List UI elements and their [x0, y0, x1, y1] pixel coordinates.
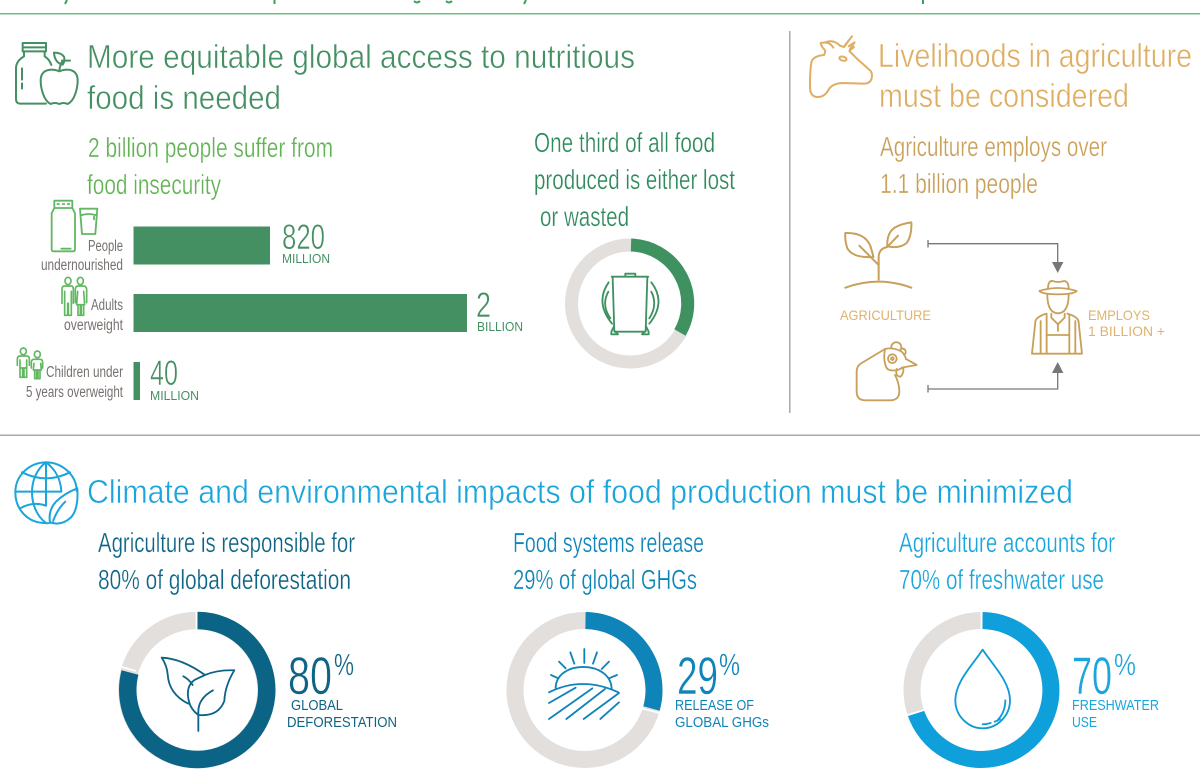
divider: vertical — [789, 31, 790, 413]
icon: sprout — [845, 222, 911, 288]
text: freshwater — [899, 527, 1115, 595]
text: food insecurity — [87, 132, 333, 200]
heading: more equitable access: food is needed — [87, 79, 281, 116]
stat: 29 percent: 29 — [677, 647, 718, 706]
text: agriculture employs: Agriculture employs over — [880, 131, 1107, 162]
value: 40 million: MILLION — [150, 388, 199, 403]
panel: climate and environment — [15, 462, 1159, 760]
label: children overweight — [26, 364, 124, 401]
icon: chicken — [857, 342, 917, 400]
text: greenhouse gases: 29% of global GHGs — [513, 564, 697, 595]
icon: children — [17, 348, 43, 379]
value: 820 million: 820 — [282, 218, 325, 257]
stat: 70 percent: % — [1114, 647, 1136, 682]
text: greenhouse gases — [513, 527, 704, 595]
value: 2 billion: 2 — [476, 286, 491, 325]
stat: 70 percent: 70 — [1072, 647, 1112, 706]
label: children overweight: 5 years overweight — [26, 384, 124, 401]
stat: 29 percent: RELEASE OF — [675, 698, 754, 714]
icon: water drop — [955, 650, 1010, 728]
label: adults overweight — [64, 297, 124, 334]
text: agriculture employs — [880, 131, 1107, 199]
icon: adults — [62, 277, 87, 315]
value: 2 billion: BILLION — [477, 319, 523, 334]
stat: 29 percent: GLOBAL GHGs — [675, 715, 769, 731]
label: children overweight: Children under — [46, 364, 123, 381]
heading: livelihoods — [878, 37, 1192, 114]
icon: cow — [810, 36, 872, 97]
label: adults overweight: overweight — [64, 317, 124, 334]
bar chart: malnutrition — [17, 201, 523, 403]
donut chart: 70 percent freshwater — [905, 611, 1051, 760]
stat: 70 percent: USE — [1072, 715, 1097, 731]
divider: horizontal — [0, 434, 1200, 436]
text: agriculture employs: 1.1 billion people — [880, 168, 1038, 199]
stat: 70 percent — [1072, 647, 1159, 731]
text: deforestation: 80% of global deforestation — [98, 564, 351, 595]
icon: sun over field — [549, 649, 619, 719]
value: 2 billion — [476, 286, 523, 334]
header rule — [0, 13, 1200, 14]
value: 820 million: MILLION — [282, 251, 330, 266]
arrow: agriculture to farmer — [928, 240, 1063, 273]
icon: jar and apple — [16, 43, 78, 104]
label: people undernourished: undernourished — [41, 257, 123, 274]
label: adults overweight: Adults — [91, 297, 123, 314]
heading: livelihoods: must be considered — [879, 77, 1129, 114]
label: employs 1 billion: 1 BILLION + — [1088, 323, 1165, 339]
text: food lost or wasted: produced is either lost — [534, 164, 735, 195]
label: employs 1 billion — [1088, 307, 1165, 339]
icon: carton and glass — [52, 201, 97, 251]
heading: more equitable access: More equitable global access to nutritious — [87, 38, 635, 75]
icon: globe and leaf — [15, 462, 78, 524]
icon: leaves — [162, 658, 234, 731]
value: 40 million — [150, 354, 199, 403]
text: food lost or wasted: or wasted — [540, 201, 629, 232]
label: employs 1 billion: EMPLOYS — [1088, 307, 1150, 323]
text: greenhouse gases: Food systems release — [513, 527, 704, 558]
label: people undernourished: People — [88, 238, 123, 255]
text: deforestation: Agriculture is responsible for — [98, 527, 355, 558]
text: food insecurity: 2 billion people suffer from — [88, 132, 333, 163]
stat: 80 percent: GLOBAL — [291, 698, 343, 714]
donut chart: 29 percent GHGs — [515, 620, 662, 760]
stat: 29 percent — [675, 647, 769, 731]
stat: 80 percent — [287, 647, 397, 731]
stat: 80 percent: % — [334, 647, 354, 682]
text: food insecurity: food insecurity — [87, 169, 221, 200]
stat: 70 percent: FRESHWATER — [1072, 698, 1159, 714]
heading: more equitable access — [87, 38, 635, 116]
heading: climate impacts: Climate and environmental impacts of food production must be minimized — [87, 474, 1073, 511]
stat: 80 percent: DEFORESTATION — [287, 715, 397, 731]
arrow: livestock to farmer — [928, 362, 1063, 392]
bar: 2 billion — [134, 294, 467, 332]
label: agriculture: AGRICULTURE — [840, 307, 931, 323]
panel: nutritious food access — [16, 38, 735, 403]
label: people undernourished — [41, 238, 123, 274]
icon: farmer — [1032, 281, 1082, 354]
text: freshwater: Agriculture accounts for — [899, 527, 1115, 558]
stat: 80 percent: 80 — [288, 647, 332, 706]
clipped header descenders — [65, 0, 923, 4]
donut chart: one third wasted — [572, 245, 689, 362]
panel: livelihoods in agriculture — [810, 36, 1192, 400]
text: freshwater: 70% of freshwater use — [899, 564, 1104, 595]
donut chart: 80 percent deforestation — [118, 611, 267, 760]
value: 40 million: 40 — [150, 354, 178, 393]
text: food lost or wasted — [534, 127, 735, 232]
text: deforestation — [98, 527, 355, 595]
icon: trash bin — [602, 274, 659, 334]
bar: 820 million — [134, 226, 270, 264]
value: 820 million — [282, 218, 330, 266]
bar: 40 million — [134, 362, 140, 400]
text: food lost or wasted: One third of all food — [534, 127, 715, 158]
stat: 29 percent: % — [719, 647, 740, 682]
